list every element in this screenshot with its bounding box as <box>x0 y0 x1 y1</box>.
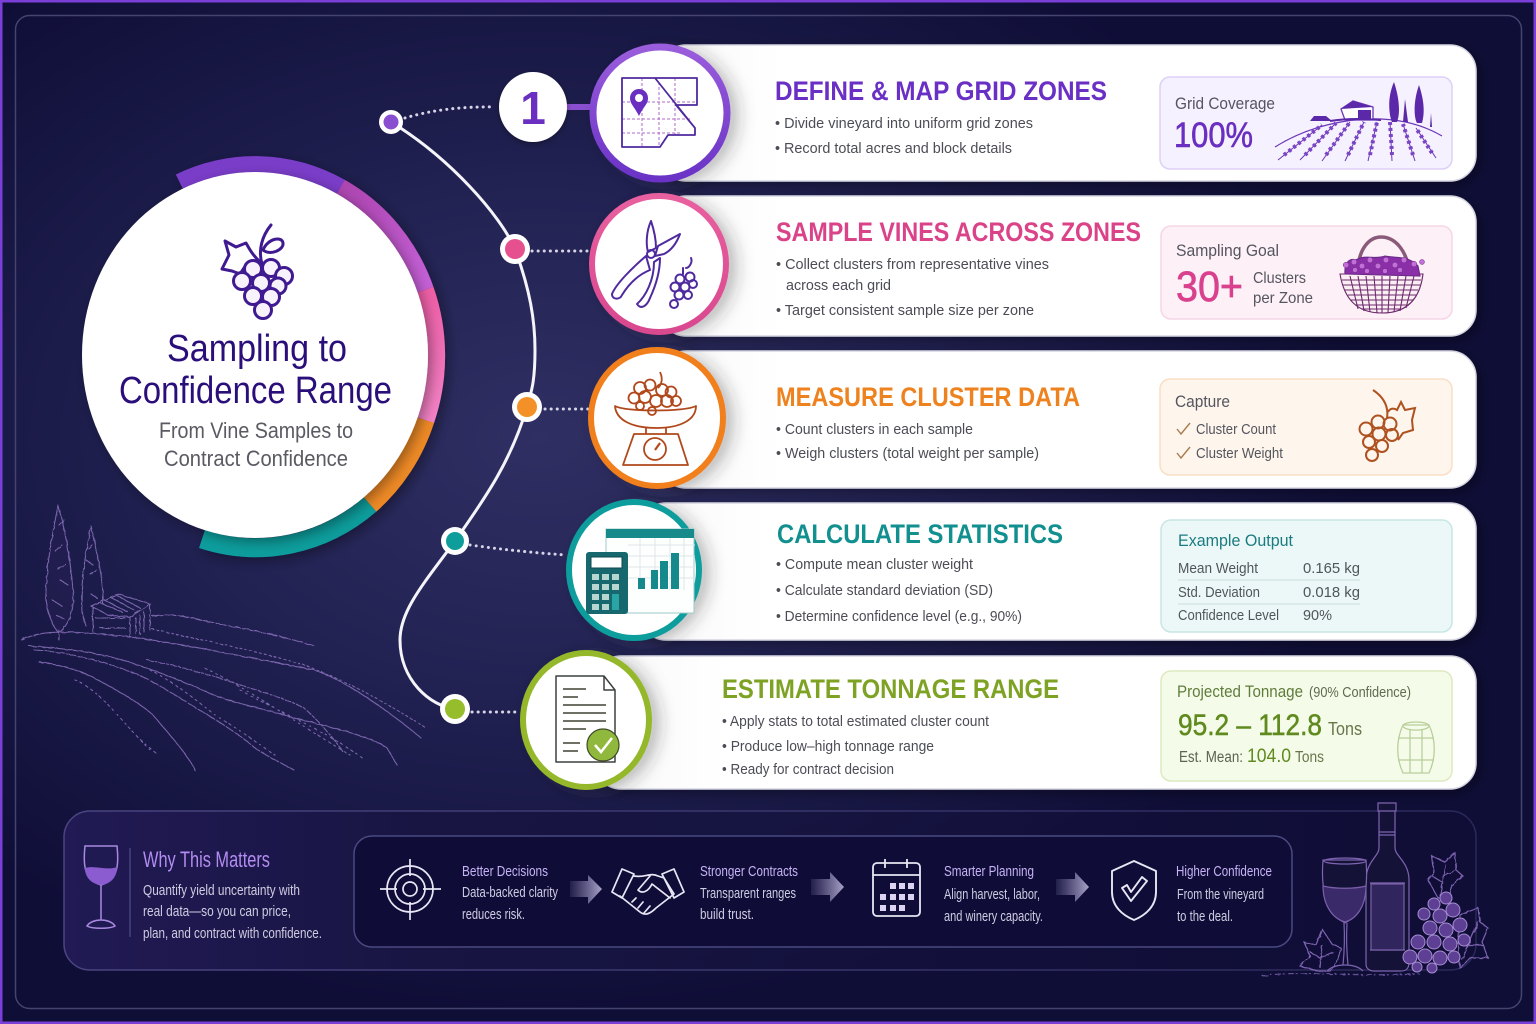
bullets: • Count clusters in each sample <box>776 421 973 438</box>
info box: projected tonnage: Tons <box>1328 719 1362 739</box>
timeline nodes <box>379 110 542 724</box>
bullets: • Determine confidence level (e.g., 90%) <box>776 608 1022 625</box>
bullets: • Weigh clusters (total weight per sample) <box>776 445 1039 462</box>
heading: MEASURE CLUSTER DATA <box>776 382 1080 412</box>
title: Confidence Range <box>119 370 392 412</box>
progress ring <box>180 166 436 548</box>
info box: projected tonnage: 104.0 <box>1247 746 1291 767</box>
step icon circle: contract document <box>523 653 649 787</box>
stronger contracts text: build trust. <box>700 907 754 923</box>
bullets <box>722 713 990 778</box>
bullets <box>775 115 1033 157</box>
panel: step 3 measure cluster data <box>591 350 1476 488</box>
smarter planning text: Smarter Planning <box>944 864 1034 880</box>
info box: capture <box>1160 379 1452 475</box>
info box: example output: Std. Deviation <box>1178 584 1260 601</box>
icon: target <box>380 859 441 920</box>
info box: example output: Confidence Level <box>1178 607 1279 624</box>
info box: example output: Mean Weight <box>1178 560 1259 577</box>
smarter planning text: and winery capacity. <box>944 909 1043 925</box>
info box: grid coverage <box>1160 77 1452 169</box>
info box: sampling goal: 30+ <box>1176 263 1243 311</box>
icon: vineyard rows <box>1275 82 1442 161</box>
subtitle <box>159 418 353 471</box>
higher confidence text: to the deal. <box>1177 909 1233 925</box>
higher confidence text: Higher Confidence <box>1176 864 1272 880</box>
info box: sampling goal: per Zone <box>1253 290 1313 307</box>
info box: projected tonnage: 95.2 – 112.8 <box>1178 709 1322 742</box>
wine still life sketch <box>1262 803 1488 976</box>
body text <box>143 883 322 942</box>
body text: plan, and contract with confidence. <box>143 926 322 942</box>
card <box>660 196 1476 336</box>
info box: projected tonnage: Tons <box>1295 749 1324 766</box>
bullets: • Calculate standard deviation (SD) <box>776 582 993 599</box>
bullets: • Apply stats to total estimated cluster count <box>722 713 990 730</box>
step icon circle: calculator and chart <box>569 502 699 638</box>
title <box>119 328 392 412</box>
card <box>640 503 1476 640</box>
icon: grape cluster with leaf <box>1360 390 1415 461</box>
central title circle <box>82 166 436 548</box>
bullets: • Compute mean cluster weight <box>776 556 974 573</box>
vineyard sketch <box>22 506 426 772</box>
step icon circle: map <box>593 47 727 179</box>
stronger contracts text <box>700 864 798 923</box>
panel: step 2 sample vines <box>592 196 1476 336</box>
better decisions text: Better Decisions <box>462 864 548 880</box>
stronger contracts text: Stronger Contracts <box>700 864 798 880</box>
heading: ESTIMATE TONNAGE RANGE <box>722 674 1059 704</box>
smarter planning text <box>944 864 1043 925</box>
subtitle: Contract Confidence <box>164 446 348 471</box>
higher confidence text: From the vineyard <box>1177 887 1264 903</box>
step 1 number badge: 1 <box>520 82 546 134</box>
smarter planning text: Align harvest, labor, <box>944 887 1040 903</box>
dotted connectors <box>405 107 590 712</box>
step icon circle: pruning shears <box>592 196 726 332</box>
info box: grid coverage: 100% <box>1174 116 1253 155</box>
info box: capture: Capture <box>1175 392 1230 411</box>
card <box>595 656 1476 789</box>
bullets: across each grid <box>786 277 891 294</box>
icon: calendar <box>873 859 920 916</box>
timeline path <box>391 122 535 709</box>
bullets: • Record total acres and block details <box>775 140 1012 157</box>
heading: CALCULATE STATISTICS <box>777 519 1063 549</box>
info box: projected tonnage: (90% Confidence) <box>1309 685 1411 701</box>
white disc <box>82 172 428 538</box>
subtitle: From Vine Samples to <box>159 418 353 443</box>
bullets: • Ready for contract decision <box>722 761 894 778</box>
card <box>660 351 1476 488</box>
bullets: • Collect clusters from representative vines <box>776 256 1049 273</box>
heading: Why This Matters <box>143 847 270 872</box>
body text: Quantify yield uncertainty with <box>143 883 300 899</box>
info box: capture: Cluster Weight <box>1196 445 1284 462</box>
better decisions text <box>462 864 559 923</box>
stronger contracts text: Transparent ranges <box>700 886 796 902</box>
info box: projected tonnage: Est. Mean: <box>1179 749 1243 766</box>
info box: projected tonnage <box>1161 671 1452 781</box>
icon: wine glass <box>84 846 118 928</box>
icon: handshake <box>612 869 684 914</box>
icon: grape basket <box>1340 237 1424 313</box>
info box: example output: 0.165 kg <box>1303 560 1360 577</box>
bullets: • Divide vineyard into uniform grid zones <box>775 115 1033 132</box>
info box: example output <box>1161 520 1452 632</box>
bullets <box>776 256 1049 319</box>
bullets <box>776 421 1039 462</box>
step 1 number badge <box>499 72 594 142</box>
info box: example output: 90% <box>1303 607 1332 624</box>
icon: grape cluster <box>222 225 292 318</box>
card <box>660 45 1476 181</box>
info box: grid coverage: Grid Coverage <box>1175 94 1275 113</box>
benefits strip <box>354 836 1292 947</box>
info box: example output: 0.018 kg <box>1303 584 1360 601</box>
icon: barrel <box>1398 722 1434 773</box>
arrow <box>811 872 844 902</box>
bullets <box>776 556 1022 625</box>
step icon circle: scale with grapes <box>591 350 723 486</box>
info box: capture: Cluster Count <box>1196 421 1277 438</box>
bullets: • Produce low–high tonnage range <box>722 738 934 755</box>
info box: sampling goal: Sampling Goal <box>1176 241 1279 260</box>
better decisions text: Data-backed clarity <box>462 885 559 901</box>
panel: why this matters <box>64 811 1476 970</box>
info box: projected tonnage: Projected Tonnage <box>1177 682 1303 701</box>
better decisions text: reduces risk. <box>462 907 525 923</box>
title: Sampling to <box>167 328 347 370</box>
icon: shield check <box>1112 861 1156 920</box>
info box: sampling goal <box>1161 226 1452 319</box>
heading: DEFINE & MAP GRID ZONES <box>775 76 1107 106</box>
bullets: • Target consistent sample size per zone <box>776 302 1034 319</box>
higher confidence text <box>1176 864 1272 925</box>
body text: real data—so you can price, <box>143 904 291 920</box>
arrow <box>570 875 602 904</box>
panel: step 4 calculate statistics <box>569 502 1476 640</box>
info box: example output: Example Output <box>1178 531 1293 550</box>
panel: step 5 estimate tonnage range <box>523 653 1476 789</box>
heading: SAMPLE VINES ACROSS ZONES <box>776 217 1141 247</box>
info box: sampling goal: Clusters <box>1253 270 1306 287</box>
panel: step 1 define and map <box>593 45 1476 181</box>
arrow <box>1056 872 1089 902</box>
